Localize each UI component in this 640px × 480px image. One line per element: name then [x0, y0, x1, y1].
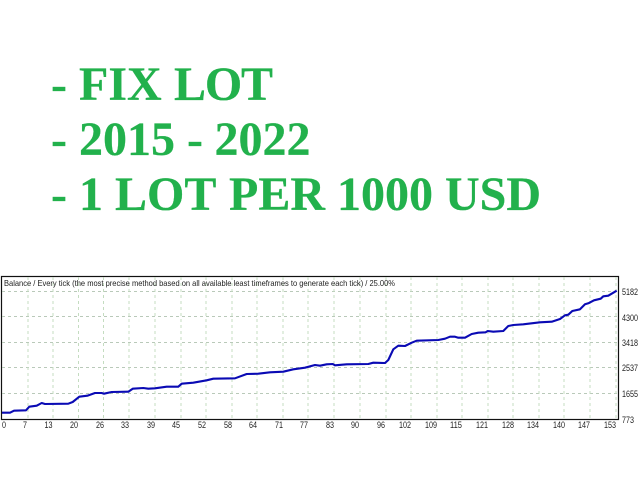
- x axis labels: 83: [326, 420, 334, 430]
- x axis labels: 26: [96, 420, 104, 430]
- x axis labels: 77: [300, 420, 308, 430]
- balance curve: [2, 291, 617, 413]
- x axis labels: 140: [553, 420, 565, 430]
- x axis labels: 128: [502, 420, 514, 430]
- x axis labels: 33: [121, 420, 129, 430]
- x axis labels: 13: [44, 420, 52, 430]
- x axis labels: 64: [249, 420, 257, 430]
- heading line: fix lot: -: [51, 58, 67, 111]
- heading line: lot per deposit: USD: [445, 168, 541, 221]
- heading line: date range: 2022: [214, 113, 310, 166]
- chart grid: [2, 277, 618, 419]
- x axis labels: 0: [2, 420, 6, 430]
- x axis labels: 115: [450, 420, 462, 430]
- x axis labels: 7: [23, 420, 27, 430]
- x axis labels: 71: [275, 420, 283, 430]
- x axis labels: 90: [351, 420, 359, 430]
- heading line: date range: -: [187, 113, 203, 166]
- heading line: date range: -: [51, 113, 67, 166]
- x axis labels: 58: [224, 420, 232, 430]
- heading line: lot per deposit: 1000: [337, 168, 433, 221]
- x axis labels: 134: [527, 420, 539, 430]
- chart frame: [2, 276, 618, 420]
- y axis labels: 773: [622, 415, 634, 425]
- x axis labels: 96: [377, 420, 385, 430]
- x axis labels: 153: [604, 420, 616, 430]
- heading: key facts list: [51, 58, 541, 221]
- heading line: lot per deposit: 1: [79, 168, 103, 221]
- x axis labels: 39: [147, 420, 155, 430]
- balance chart: [2, 276, 638, 430]
- x axis labels: 20: [70, 420, 78, 430]
- heading line: date range: 2015: [79, 113, 175, 166]
- x axis labels: 45: [172, 420, 180, 430]
- heading line: lot per deposit: -: [51, 168, 67, 221]
- chart title: Balance / Every tick (the most precise method based on all available least timeframes to generate each tick) / 25.00%: [4, 278, 395, 288]
- heading line: fix lot: FIX: [79, 58, 162, 111]
- x axis labels: 147: [578, 420, 590, 430]
- x axis labels: [2, 420, 616, 430]
- x axis labels: 52: [198, 420, 206, 430]
- x axis labels: 121: [476, 420, 488, 430]
- x axis labels: 109: [425, 420, 437, 430]
- heading line: fix lot: LOT: [174, 58, 273, 111]
- y axis labels: [622, 287, 638, 425]
- heading line: lot per deposit: PER: [229, 168, 326, 221]
- x axis labels: 102: [399, 420, 411, 430]
- heading line: lot per deposit: LOT: [115, 168, 216, 221]
